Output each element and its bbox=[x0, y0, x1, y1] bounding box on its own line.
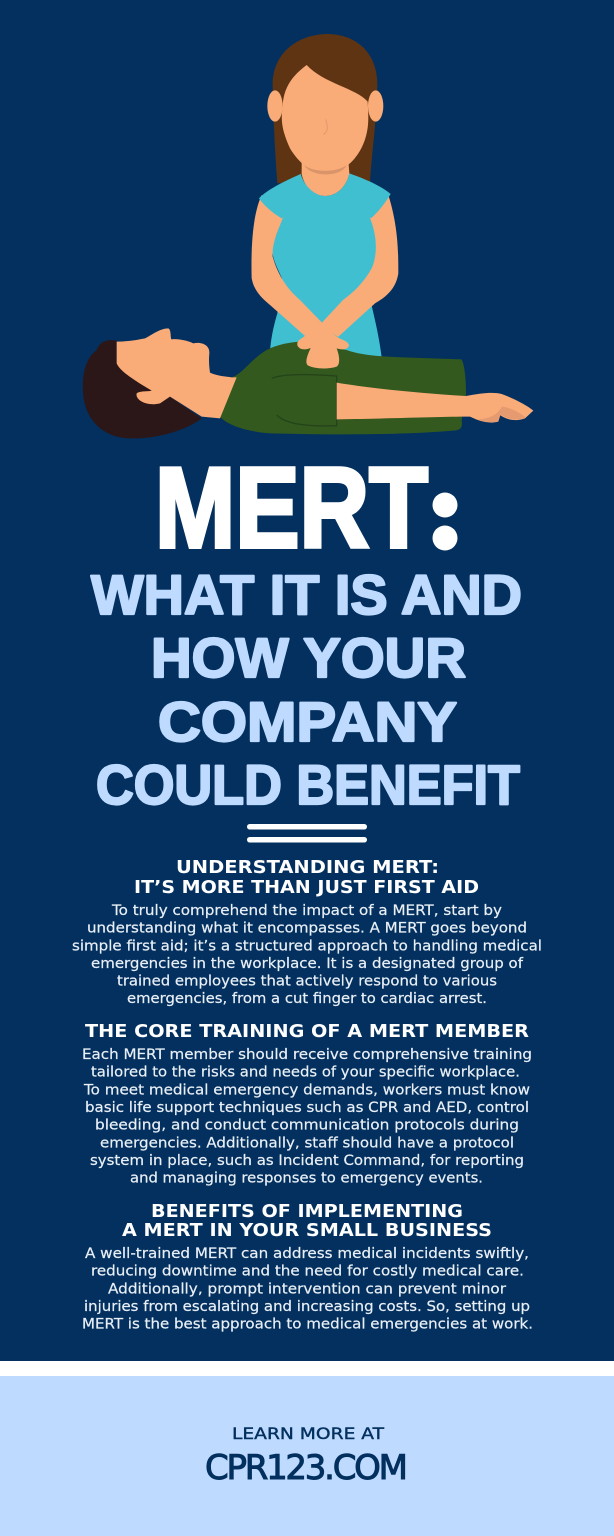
section heading: understanding MERT bbox=[134, 858, 479, 898]
section heading: understanding MERT: UNDERSTANDING MERT: bbox=[176, 858, 439, 878]
footer label: LEARN MORE AT bbox=[232, 1424, 384, 1443]
man's fingers shading bbox=[478, 407, 526, 422]
subtitle bbox=[91, 563, 522, 816]
woman's right arm bbox=[321, 195, 398, 337]
title colon: : bbox=[430, 465, 460, 564]
panel: footer bbox=[0, 1376, 614, 1536]
text block: understanding MERT: emergencies, from a cut finger to cardiac arrest. bbox=[127, 991, 487, 1007]
text block: understanding MERT bbox=[72, 903, 542, 1007]
woman's left sleeve bbox=[259, 174, 303, 218]
section heading: core training: THE CORE TRAINING OF A MERT MEMBER bbox=[85, 1022, 530, 1042]
woman's shirt bbox=[270, 173, 382, 357]
divider bars bbox=[247, 824, 367, 842]
text block: benefits: A well-trained MERT can address medical incidents swiftly, bbox=[85, 1246, 529, 1262]
text block: core training: basic life support techniques such as CPR and AED, control bbox=[85, 1100, 529, 1116]
text block: benefits: reducing downtime and the need for costly medical care. bbox=[91, 1264, 524, 1280]
woman's nose bbox=[323, 119, 327, 135]
section heading: benefits: BENEFITS OF IMPLEMENTING bbox=[151, 1202, 463, 1222]
woman's hands bbox=[297, 323, 349, 368]
woman's chin shadow bbox=[304, 165, 347, 174]
woman's face bbox=[282, 65, 368, 172]
text block: understanding MERT: simple first aid; it’s a structured approach to handling medical bbox=[72, 938, 542, 954]
man's shirt bbox=[220, 342, 466, 434]
text block: benefits bbox=[82, 1246, 533, 1333]
section heading: understanding MERT: IT’S MORE THAN JUST FIRST AID bbox=[134, 878, 479, 898]
text block: benefits: MERT is the best approach to medical emergencies at work. bbox=[82, 1317, 533, 1333]
text block: core training: To meet medical emergency demands, workers must know bbox=[83, 1082, 530, 1098]
white band bbox=[0, 1361, 614, 1376]
subtitle: COMPANY bbox=[158, 690, 457, 753]
text block: core training: Each MERT member should receive comprehensive training bbox=[82, 1047, 532, 1063]
footer website: CPR123.COM bbox=[205, 1448, 408, 1488]
text block: understanding MERT: emergencies in the workplace. It is a designated group of bbox=[91, 956, 524, 972]
text block: understanding MERT: trained employees that actively respond to various bbox=[117, 974, 497, 990]
woman's ears bbox=[267, 90, 383, 122]
subtitle: WHAT IT IS AND bbox=[91, 563, 522, 626]
man's head and neck bbox=[117, 328, 237, 418]
text block: benefits: injuries from escalating and increasing costs. So, setting up bbox=[84, 1299, 530, 1315]
text block: core training: tailored to the risks and needs of your specific workplace. bbox=[91, 1065, 520, 1081]
woman's hair bbox=[273, 34, 377, 183]
illustration: woman performing CPR on a man bbox=[83, 34, 533, 438]
title colon round dots bbox=[432, 492, 458, 550]
text block: core training: and managing responses to emergency events. bbox=[130, 1171, 483, 1187]
text block: core training: emergencies. Additionally, staff should have a protocol bbox=[100, 1135, 514, 1151]
section heading: benefits: A MERT IN YOUR SMALL BUSINESS bbox=[122, 1221, 492, 1241]
text block: understanding MERT: To truly comprehend the impact of a MERT, start by bbox=[111, 903, 502, 919]
man's hair bbox=[83, 340, 202, 438]
text block: understanding MERT: understanding what it encompasses. A MERT goes beyond bbox=[87, 921, 527, 937]
subtitle: HOW YOUR bbox=[151, 626, 466, 689]
title: MERT: MERT bbox=[155, 445, 428, 572]
text block: core training bbox=[82, 1047, 532, 1187]
woman's left arm bbox=[251, 195, 323, 336]
text block: benefits: Additionally, prompt intervention can prevent minor bbox=[108, 1281, 506, 1297]
section heading: benefits bbox=[122, 1202, 492, 1241]
man's sleeve folds bbox=[272, 374, 337, 426]
text block: core training: system in place, such as Incident Command, for reporting bbox=[90, 1153, 524, 1169]
text block: core training: bleeding, and conduct communication protocols during bbox=[95, 1118, 519, 1134]
woman's neck bbox=[302, 160, 349, 196]
man's arm and hand bbox=[337, 383, 533, 423]
woman's right sleeve bbox=[347, 173, 391, 218]
subtitle: COULD BENEFIT bbox=[96, 753, 520, 816]
